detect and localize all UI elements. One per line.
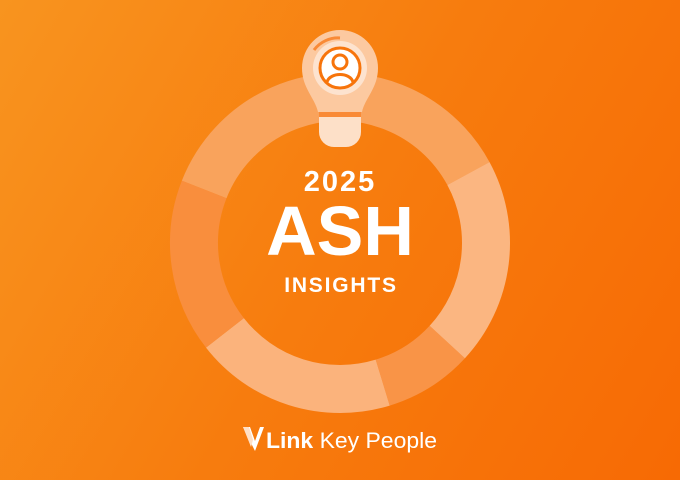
title: 2025: 2025 (304, 166, 376, 198)
title: ASH: ASH (266, 192, 414, 270)
logo: Link Key People (266, 428, 437, 453)
icon: lightbulb (302, 30, 378, 147)
donut chart (134, 37, 546, 449)
subtitle: INSIGHTS: INSIGHTS (284, 274, 398, 297)
